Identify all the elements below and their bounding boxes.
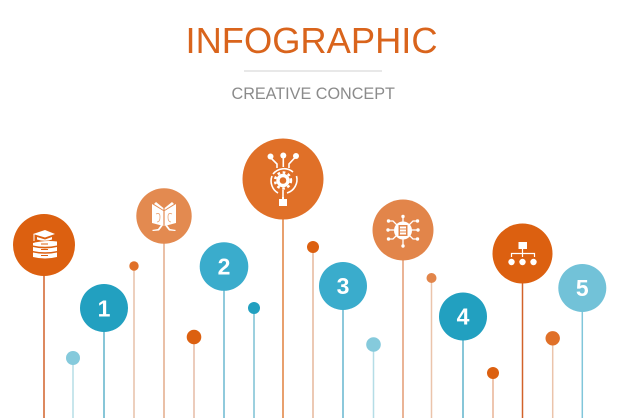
icon: graduation cap on database (33, 230, 57, 258)
pin: number 1 (80, 284, 128, 418)
dot pin: light blue left (66, 351, 80, 418)
pin: number 2 (200, 242, 248, 418)
dot pin: orange (187, 330, 201, 418)
pin: number 4 (439, 292, 487, 418)
icon: org chart (508, 242, 537, 265)
pin: database education (13, 214, 75, 418)
title: INFOGRAPHIC (186, 20, 438, 61)
pin: gear network (242, 138, 324, 418)
pin: number 3: 3 (337, 273, 349, 299)
pin: number 2: 2 (218, 254, 230, 280)
dot pin: small orange (129, 261, 139, 418)
pin: number 1: 1 (98, 296, 111, 322)
pin: data hub (372, 200, 434, 418)
pin: number 3 (319, 262, 367, 418)
icon: open book with brain (152, 202, 176, 231)
pin: book brain (136, 188, 192, 418)
dot pin: orange (487, 367, 499, 418)
pin: number 4: 4 (457, 304, 470, 330)
dot pin: orange (307, 241, 319, 418)
pin: number 5: 5 (576, 275, 589, 301)
pin: number 5 (558, 264, 606, 418)
pin: hierarchy (492, 224, 552, 418)
icon: database hub with nodes (386, 215, 420, 248)
icon: gear with three nodes (268, 152, 299, 206)
dot pin: blue (248, 302, 260, 418)
dot pin: light blue (366, 337, 381, 418)
dot pin: orange right (546, 331, 560, 418)
subtitle: CREATIVE CONCEPT (232, 85, 395, 103)
dot pin: small orange right (426, 273, 436, 418)
